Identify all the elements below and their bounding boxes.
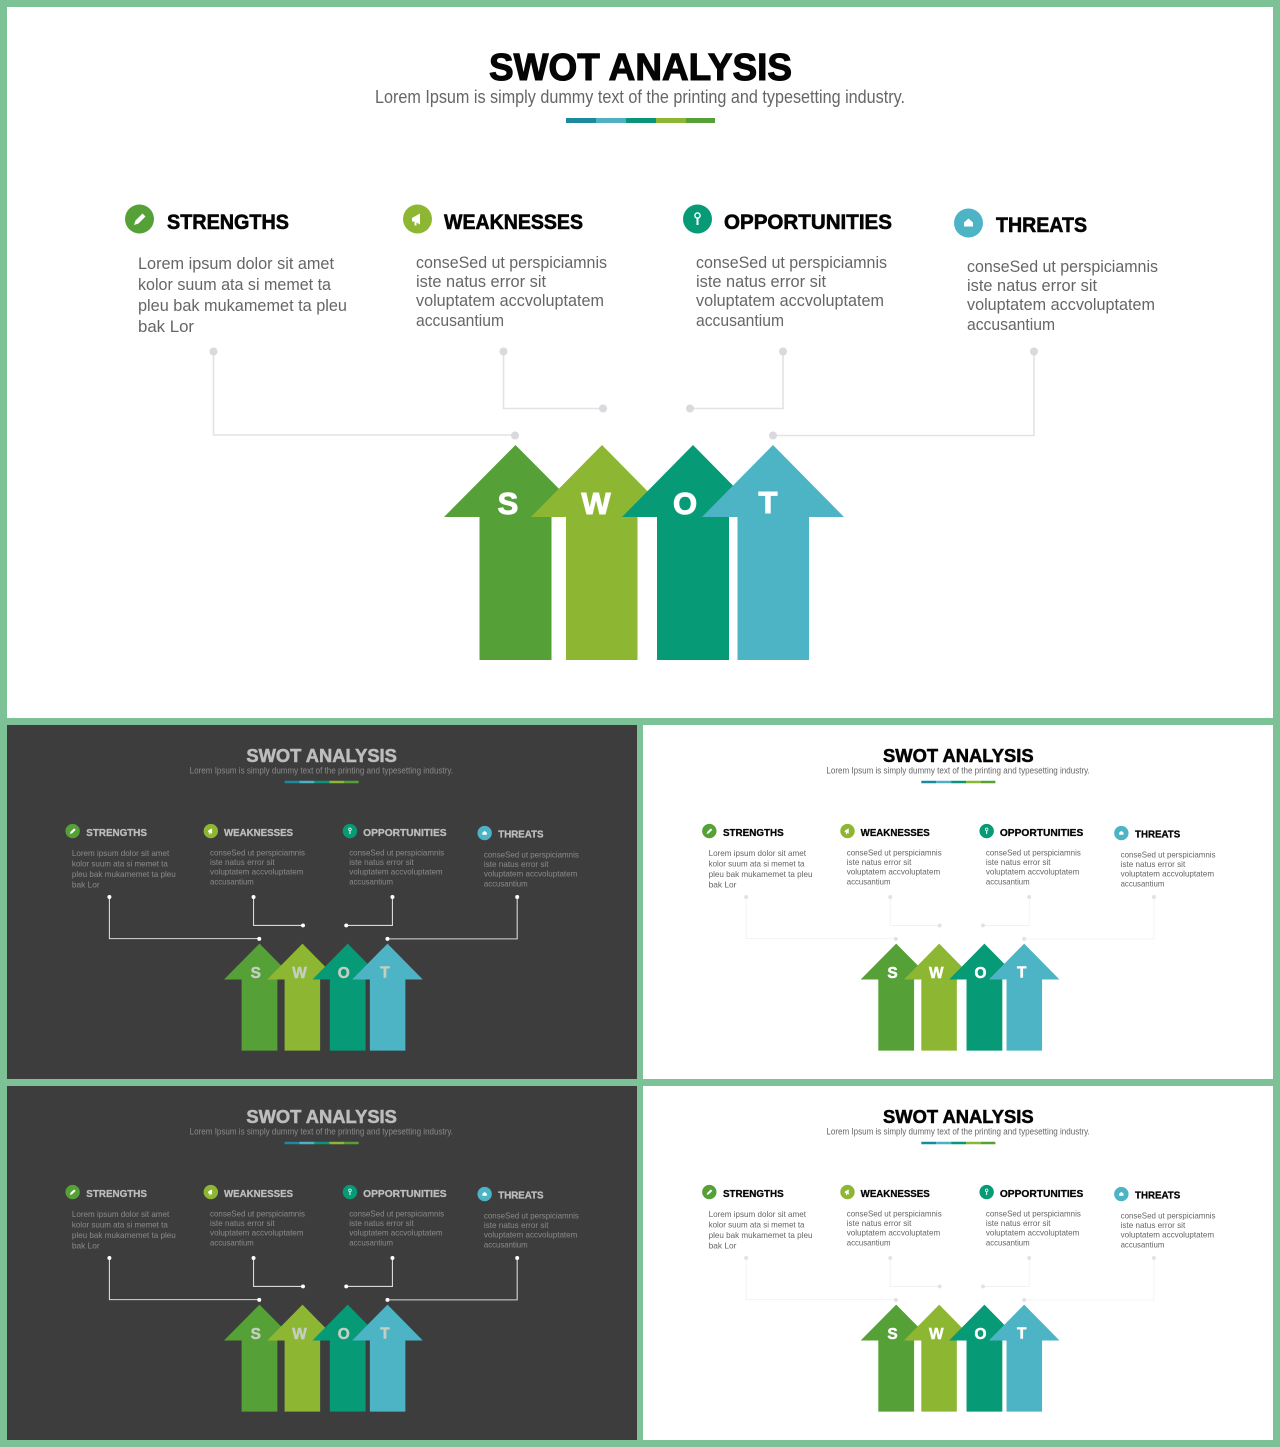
connectors	[210, 348, 1038, 440]
text: threats: voluptatem accvoluptatem	[1121, 1229, 1214, 1239]
text: threats: iste natus error sit	[484, 859, 549, 869]
text: weaknesses	[416, 253, 607, 330]
text: opportunities: iste natus error sit	[696, 272, 826, 291]
icon: weaknesses megaphone	[840, 824, 855, 838]
text: opportunities: conseSed ut perspiciamnis	[349, 847, 444, 857]
arrow: T	[989, 1305, 1059, 1412]
text: weaknesses: iste natus error sit	[416, 272, 546, 291]
text: weaknesses: voluptatem accvoluptatem	[847, 1227, 940, 1237]
heading: weaknesses: WEAKNESSES	[444, 211, 583, 234]
icon: threats house	[954, 208, 983, 238]
text: weaknesses	[210, 847, 305, 886]
text: strengths: pleu bak mukamemet ta pleu	[72, 869, 176, 879]
icon: opportunities key	[979, 824, 994, 838]
text: opportunities: accusantium	[349, 876, 393, 886]
slide: white top right	[702, 746, 1216, 1051]
arrow letters	[887, 1325, 1027, 1343]
text: opportunities: conseSed ut perspiciamnis	[349, 1208, 444, 1218]
text: threats: voluptatem accvoluptatem	[967, 295, 1155, 314]
connectors	[107, 895, 519, 941]
arrow letters: W	[929, 1326, 944, 1343]
text: strengths: Lorem ipsum dolor sit amet	[72, 1209, 170, 1219]
text: threats	[1121, 849, 1216, 888]
arrow letters: T	[380, 964, 390, 981]
heading: strengths: STRENGTHS	[86, 1189, 147, 1200]
slide: white bottom right	[702, 1107, 1216, 1412]
text: strengths: kolor suum ata si memet ta	[138, 275, 332, 294]
heading: threats: THREATS	[1135, 1191, 1180, 1202]
text: opportunities	[349, 1208, 444, 1247]
text: threats	[484, 849, 579, 888]
arrow letters: W	[581, 486, 611, 521]
text: threats: conseSed ut perspiciamnis	[1121, 849, 1216, 859]
text: strengths: Lorem ipsum dolor sit amet	[138, 254, 334, 273]
subtitle: Lorem Ipsum is simply dummy text of the printing and typesetting industry.	[190, 1126, 453, 1136]
text: weaknesses: conseSed ut perspiciamnis	[210, 847, 305, 857]
text: strengths	[72, 848, 176, 889]
arrow letters	[887, 964, 1027, 982]
heading: threats: THREATS	[1135, 830, 1180, 841]
text: strengths: kolor suum ata si memet ta	[72, 1219, 168, 1229]
arrow: T	[352, 1305, 423, 1412]
heading: threats: THREATS	[996, 214, 1087, 237]
arrow letters: O	[673, 486, 697, 521]
text: threats: voluptatem accvoluptatem	[484, 868, 577, 878]
text: strengths: bak Lor	[72, 1240, 100, 1250]
heading: strengths: STRENGTHS	[86, 828, 147, 839]
text: strengths: Lorem ipsum dolor sit amet	[709, 848, 807, 858]
arrow: S	[444, 445, 587, 660]
text: opportunities: conseSed ut perspiciamnis	[986, 1208, 1081, 1218]
heading: weaknesses: WEAKNESSES	[224, 828, 293, 839]
heading: threats: THREATS	[498, 830, 544, 841]
text: weaknesses: voluptatem accvoluptatem	[847, 866, 940, 876]
text: strengths: bak Lor	[138, 317, 194, 336]
arrow letters	[498, 485, 778, 521]
text: weaknesses: voluptatem accvoluptatem	[210, 1227, 303, 1237]
arrow: O	[622, 445, 764, 660]
text: weaknesses: conseSed ut perspiciamnis	[210, 1208, 305, 1218]
title: SWOT ANALYSIS	[246, 746, 397, 767]
arrow letters: S	[887, 965, 898, 982]
text: threats: conseSed ut perspiciamnis	[484, 1210, 579, 1220]
text: opportunities: conseSed ut perspiciamnis	[696, 253, 887, 272]
icon: weaknesses megaphone	[204, 824, 218, 838]
title: SWOT ANALYSIS	[246, 1107, 397, 1128]
text: weaknesses: iste natus error sit	[210, 857, 275, 867]
text: weaknesses: voluptatem accvoluptatem	[210, 866, 303, 876]
text: threats: conseSed ut perspiciamnis	[1121, 1210, 1216, 1220]
text: threats: iste natus error sit	[1121, 859, 1186, 869]
text: threats: accusantium	[967, 315, 1055, 334]
icon: threats house	[477, 826, 492, 840]
title underline	[285, 1142, 359, 1144]
arrow: W	[267, 1305, 338, 1412]
heading: strengths: STRENGTHS	[723, 1189, 784, 1200]
slide: dark bottom left	[65, 1107, 579, 1412]
panel: white slide bottom right	[643, 1086, 1273, 1440]
arrow: O	[949, 1305, 1020, 1412]
text: opportunities: accusantium	[986, 1237, 1030, 1247]
arrow: W	[267, 944, 338, 1051]
text: threats: accusantium	[484, 878, 528, 888]
text: threats: iste natus error sit	[1121, 1220, 1186, 1230]
title: SWOT ANALYSIS	[489, 47, 792, 89]
icon: strengths pencil	[702, 824, 717, 838]
arrow letters: O	[974, 1326, 986, 1343]
arrow letters: W	[292, 965, 307, 982]
text: threats: conseSed ut perspiciamnis	[484, 849, 579, 859]
text: opportunities: iste natus error sit	[986, 1218, 1051, 1228]
heading: opportunities: OPPORTUNITIES	[1000, 828, 1083, 839]
text: opportunities: conseSed ut perspiciamnis	[986, 847, 1081, 857]
text: opportunities	[349, 847, 444, 886]
text: strengths: pleu bak mukamemet ta pleu	[709, 869, 813, 879]
text: weaknesses	[847, 1208, 942, 1247]
connectors	[744, 1256, 1156, 1302]
heading: strengths: STRENGTHS	[167, 211, 289, 234]
icon: weaknesses megaphone	[840, 1185, 855, 1199]
text: weaknesses: accusantium	[847, 876, 890, 886]
text: opportunities	[986, 847, 1081, 886]
arrow letters	[251, 1325, 390, 1343]
title underline	[566, 118, 715, 123]
text: strengths: Lorem ipsum dolor sit amet	[72, 848, 170, 858]
heading: opportunities: OPPORTUNITIES	[363, 828, 447, 839]
text: weaknesses	[847, 847, 942, 886]
text: strengths: pleu bak mukamemet ta pleu	[138, 296, 347, 315]
heading: weaknesses: WEAKNESSES	[224, 1189, 293, 1200]
heading: strengths: STRENGTHS	[723, 828, 784, 839]
heading: opportunities: OPPORTUNITIES	[1000, 1189, 1083, 1200]
text: weaknesses: iste natus error sit	[847, 1218, 912, 1228]
text: opportunities: accusantium	[349, 1237, 393, 1247]
slide: dark top left	[65, 746, 579, 1051]
arrow: S	[861, 1305, 932, 1412]
text: threats: accusantium	[1121, 878, 1164, 888]
text: strengths: pleu bak mukamemet ta pleu	[72, 1230, 176, 1240]
text: weaknesses: iste natus error sit	[847, 857, 912, 867]
text: threats	[967, 257, 1158, 334]
text: opportunities: voluptatem accvoluptatem	[349, 1227, 443, 1237]
subtitle: Lorem Ipsum is simply dummy text of the printing and typesetting industry.	[190, 765, 453, 775]
arrow letters: S	[251, 965, 261, 982]
text: weaknesses: conseSed ut perspiciamnis	[416, 253, 607, 272]
panel: main white slide	[7, 7, 1273, 718]
arrow: T	[989, 944, 1059, 1051]
title underline	[921, 1142, 995, 1144]
text: threats	[1121, 1210, 1216, 1249]
text: strengths: bak Lor	[709, 1240, 737, 1250]
text: strengths	[709, 1209, 813, 1250]
arrow letters: S	[498, 486, 518, 521]
arrow letters: T	[1017, 964, 1027, 981]
icon: opportunities key	[683, 204, 712, 234]
text: weaknesses: iste natus error sit	[210, 1218, 275, 1228]
subtitle: Lorem Ipsum is simply dummy text of the printing and typesetting industry.	[375, 87, 905, 107]
arrow: O	[312, 944, 383, 1051]
text: strengths: pleu bak mukamemet ta pleu	[709, 1230, 813, 1240]
arrow: O	[949, 944, 1020, 1051]
arrow: S	[224, 944, 295, 1051]
text: strengths	[72, 1209, 176, 1250]
arrow: W	[531, 445, 673, 660]
text: weaknesses: voluptatem accvoluptatem	[416, 291, 604, 310]
icon: opportunities key	[343, 824, 357, 838]
connectors	[744, 895, 1156, 941]
heading: opportunities: OPPORTUNITIES	[724, 211, 892, 234]
text: strengths: bak Lor	[72, 879, 100, 889]
text: threats: voluptatem accvoluptatem	[484, 1229, 577, 1239]
text: threats: voluptatem accvoluptatem	[1121, 868, 1214, 878]
connectors	[107, 1256, 519, 1302]
text: opportunities	[696, 253, 887, 330]
text: threats: accusantium	[1121, 1239, 1164, 1249]
text: strengths: kolor suum ata si memet ta	[709, 858, 805, 868]
title: SWOT ANALYSIS	[883, 1107, 1034, 1128]
icon: strengths pencil	[702, 1185, 717, 1199]
text: strengths: kolor suum ata si memet ta	[709, 1219, 805, 1229]
icon: threats house	[477, 1187, 492, 1201]
icon: opportunities key	[343, 1185, 357, 1199]
icon: strengths pencil	[125, 204, 154, 234]
text: weaknesses: accusantium	[210, 876, 254, 886]
icon: threats house	[1114, 1187, 1129, 1201]
text: weaknesses: accusantium	[210, 1237, 254, 1247]
text: strengths	[138, 254, 347, 336]
arrow letters: W	[929, 965, 944, 982]
heading: weaknesses: WEAKNESSES	[861, 828, 930, 839]
arrow letters: T	[380, 1325, 390, 1342]
text: opportunities	[986, 1208, 1081, 1247]
arrow letters: O	[338, 1326, 350, 1343]
text: threats: iste natus error sit	[484, 1220, 549, 1230]
text: opportunities: voluptatem accvoluptatem	[349, 866, 443, 876]
text: weaknesses: accusantium	[416, 311, 504, 330]
text: weaknesses: conseSed ut perspiciamnis	[847, 847, 942, 857]
arrow: S	[861, 944, 932, 1051]
icon: strengths pencil	[65, 1185, 80, 1199]
title: SWOT ANALYSIS	[883, 746, 1034, 767]
panel: dark slide top left	[7, 725, 637, 1079]
arrow letters: O	[974, 965, 986, 982]
heading: threats: THREATS	[498, 1191, 544, 1202]
text: opportunities: voluptatem accvoluptatem	[986, 1227, 1079, 1237]
heading: opportunities: OPPORTUNITIES	[363, 1189, 447, 1200]
text: opportunities: iste natus error sit	[349, 1218, 414, 1228]
text: weaknesses: conseSed ut perspiciamnis	[847, 1208, 942, 1218]
slide: main SWOT analysis	[125, 47, 1158, 660]
icon: opportunities key	[979, 1185, 994, 1199]
icon: weaknesses megaphone	[403, 204, 432, 234]
arrow letters: O	[338, 965, 350, 982]
text: strengths: kolor suum ata si memet ta	[72, 858, 168, 868]
arrow: W	[904, 944, 974, 1051]
arrow: T	[352, 944, 423, 1051]
text: strengths: bak Lor	[709, 879, 737, 889]
arrow: T	[702, 445, 844, 660]
arrow letters: W	[292, 1326, 307, 1343]
icon: strengths pencil	[65, 824, 80, 838]
text: weaknesses: accusantium	[847, 1237, 890, 1247]
text: threats: iste natus error sit	[967, 276, 1097, 295]
title underline	[921, 781, 995, 783]
arrow letters: S	[251, 1326, 261, 1343]
text: weaknesses	[210, 1208, 305, 1247]
text: opportunities: iste natus error sit	[986, 857, 1051, 867]
icon: weaknesses megaphone	[204, 1185, 218, 1199]
subtitle: Lorem Ipsum is simply dummy text of the printing and typesetting industry.	[826, 765, 1090, 775]
arrow: W	[904, 1305, 974, 1412]
icon: threats house	[1114, 826, 1129, 840]
title underline	[285, 781, 359, 783]
arrow letters: T	[759, 485, 778, 520]
text: opportunities: voluptatem accvoluptatem	[696, 291, 884, 310]
arrow: O	[312, 1305, 383, 1412]
text: threats: accusantium	[484, 1239, 528, 1249]
text: threats	[484, 1210, 579, 1249]
arrow letters	[251, 964, 390, 982]
arrow: S	[224, 1305, 295, 1412]
text: opportunities: accusantium	[696, 311, 784, 330]
panel: dark slide bottom left	[7, 1086, 637, 1440]
text: opportunities: accusantium	[986, 876, 1030, 886]
heading: weaknesses: WEAKNESSES	[861, 1189, 930, 1200]
panel: white slide top right	[643, 725, 1273, 1079]
text: strengths: Lorem ipsum dolor sit amet	[709, 1209, 807, 1219]
subtitle: Lorem Ipsum is simply dummy text of the printing and typesetting industry.	[826, 1126, 1090, 1136]
text: threats: conseSed ut perspiciamnis	[967, 257, 1158, 276]
text: opportunities: iste natus error sit	[349, 857, 414, 867]
arrow letters: T	[1017, 1325, 1027, 1342]
text: strengths	[709, 848, 813, 889]
arrow letters: S	[887, 1326, 898, 1343]
text: opportunities: voluptatem accvoluptatem	[986, 866, 1079, 876]
